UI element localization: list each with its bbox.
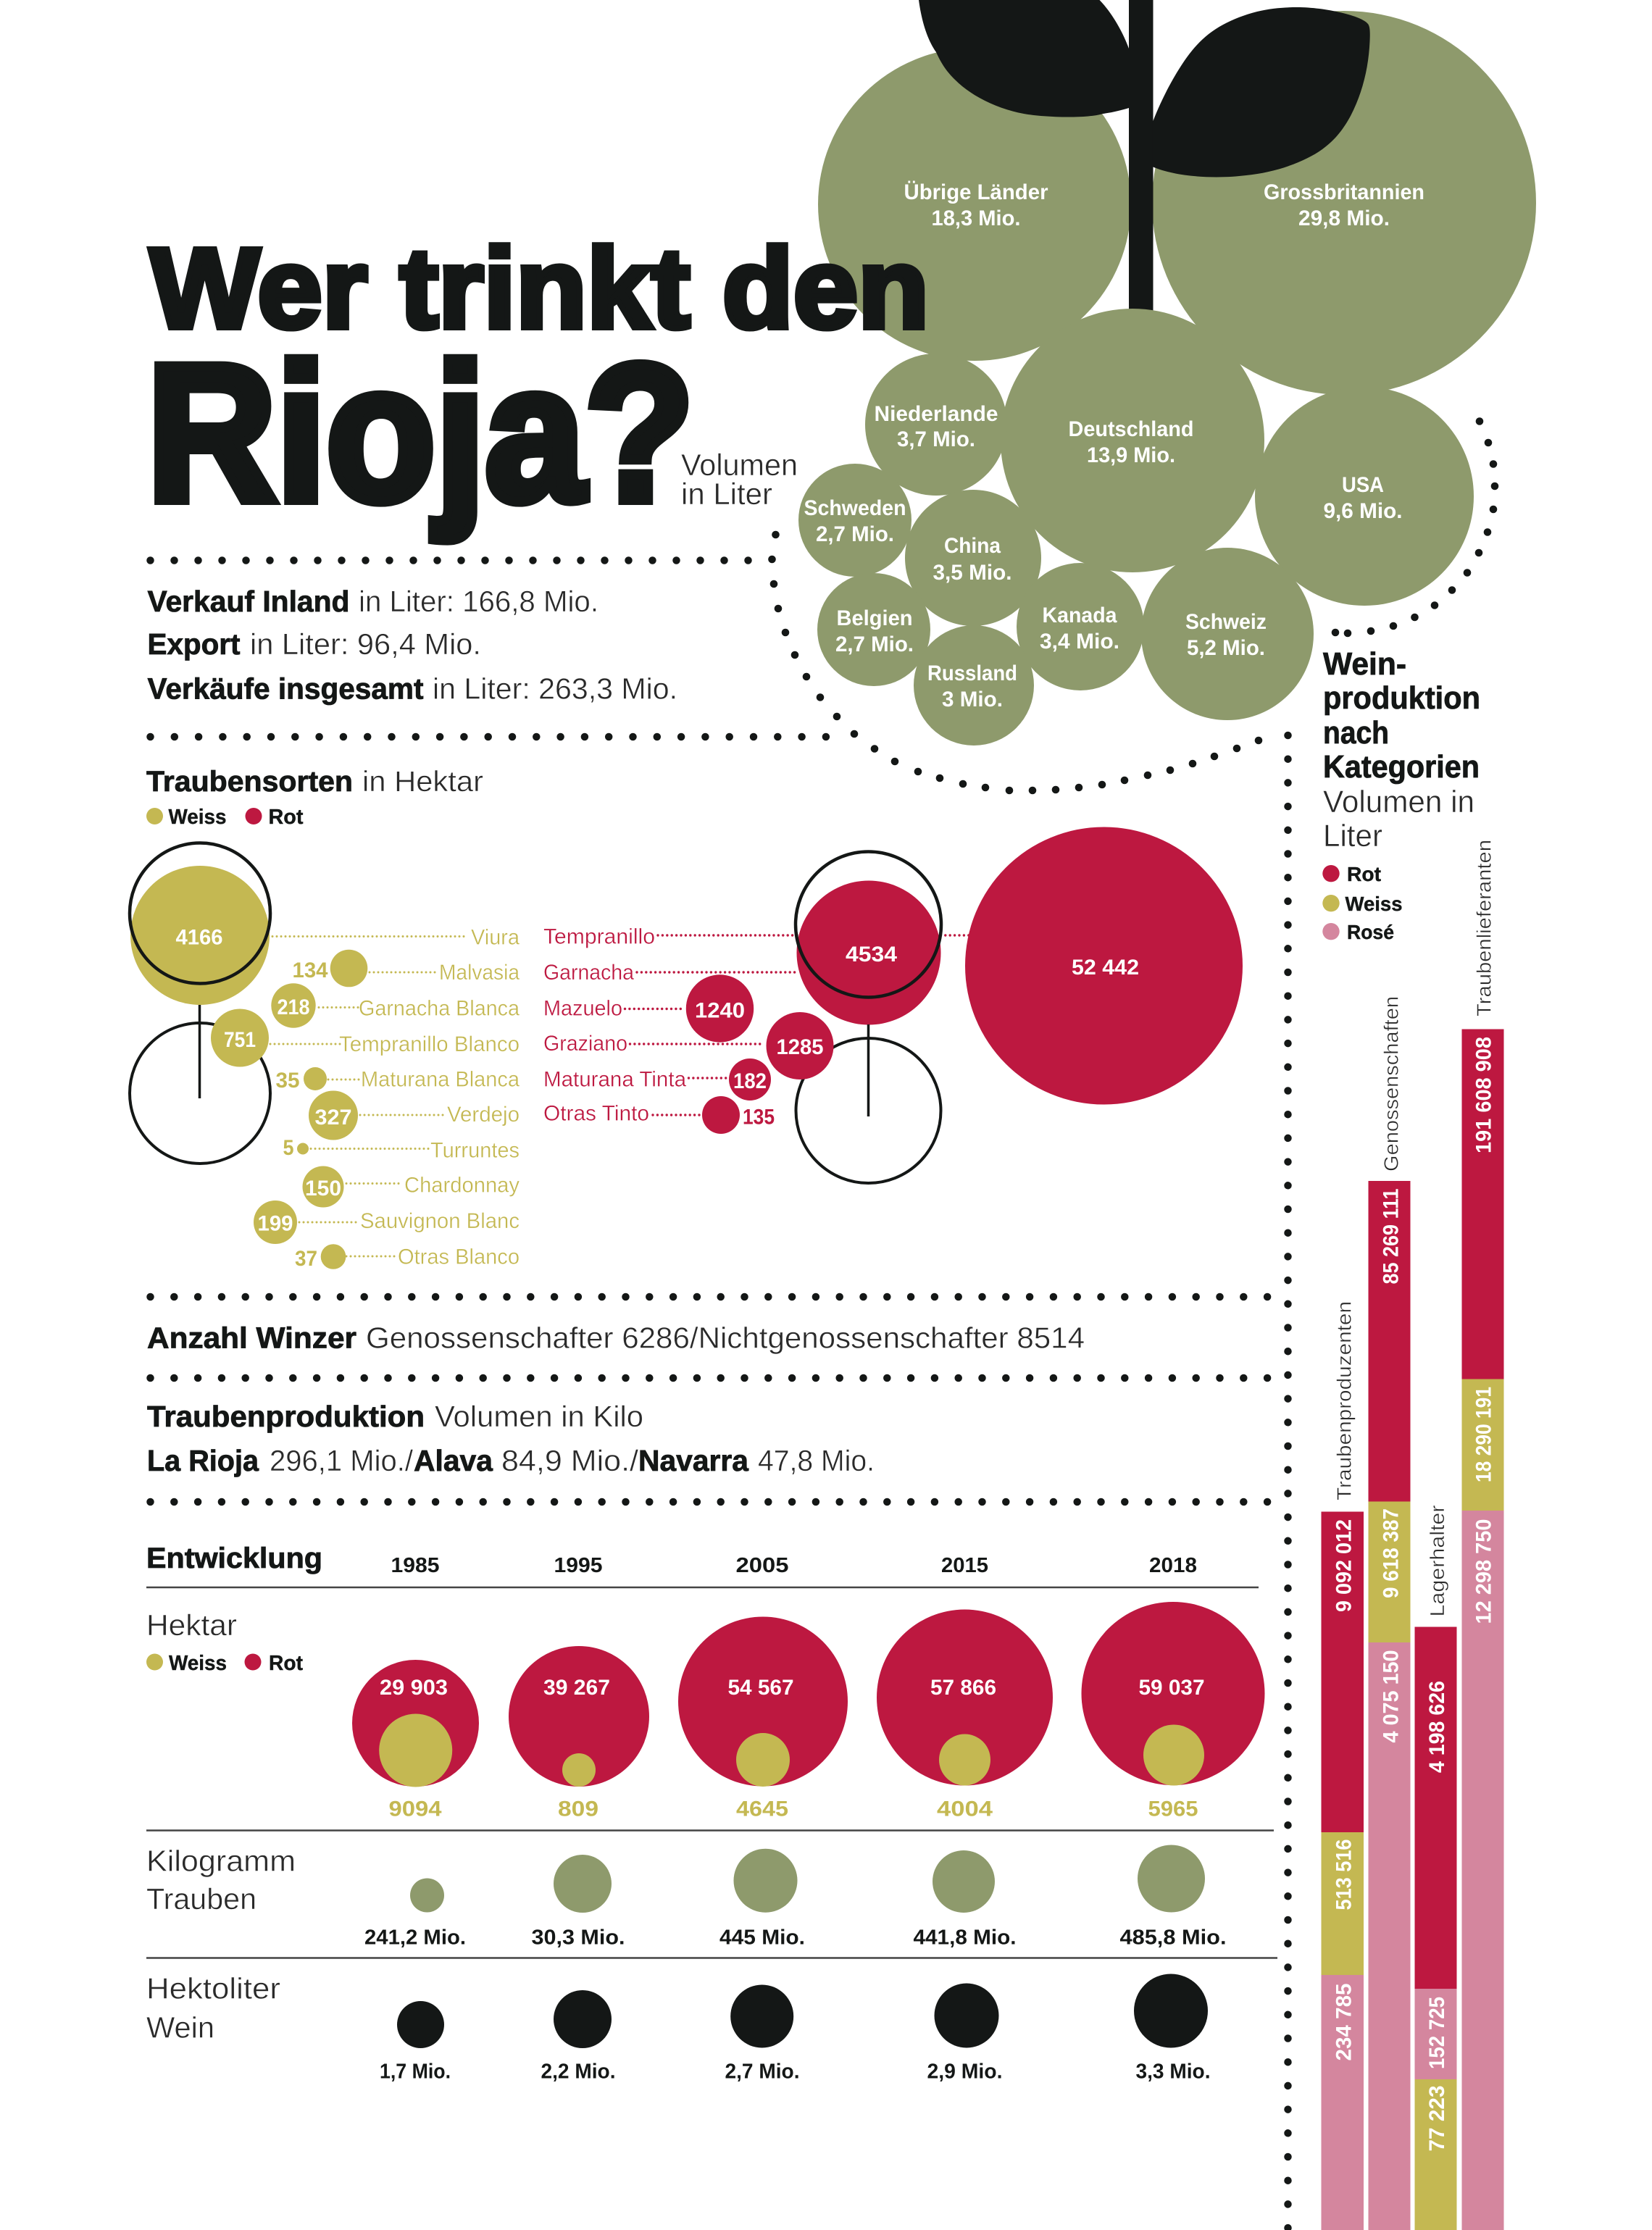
names white varieties: Turruntes (430, 1139, 520, 1162)
chart: white grape varieties (130, 843, 520, 1271)
label: Deutschland: Deutschland (1068, 417, 1194, 441)
values hectares white: 809 (558, 1797, 598, 1821)
label: Niederlande: 3,7 Mio. (897, 427, 975, 451)
row label: Kilogramm Trauben: Trauben (146, 1882, 256, 1916)
text block: sales volumes: in Liter: 263,3 Mio. (433, 672, 677, 706)
values white varieties: 327 (314, 1106, 352, 1129)
row label: Hektar: Hektar (146, 1608, 237, 1642)
label: Deutschland: 13,9 Mio. (1087, 443, 1175, 467)
values kilogram grapes: 445 Mio. (719, 1926, 805, 1949)
chart: stacked bar Genossenschaften: 85 269 111 (1380, 1188, 1403, 1284)
values white varieties: 134 (293, 959, 328, 982)
names white varieties: Verdejo (447, 1103, 520, 1127)
label: Grossbritannien: Grossbritannien (1264, 180, 1424, 204)
values white varieties: 199 (258, 1211, 293, 1236)
grape: Kanada (1017, 563, 1144, 690)
names white varieties: Malvasia (439, 961, 520, 985)
grape: Belgien (817, 573, 930, 686)
chart: stacked bar Traubenproduzenten: Traubenproduzenten (1333, 1301, 1355, 1500)
dotted dividers (151, 561, 1288, 2230)
names white varieties: Garnacha Blanca (359, 997, 520, 1020)
values white varieties: 4166 (175, 926, 223, 949)
grape: Schweden (798, 464, 911, 577)
names red varieties: Otras Tinto (543, 1101, 649, 1126)
label: Grossbritannien: 29,8 Mio. (1298, 206, 1390, 230)
chart: stacked bar Lagerhalter (1414, 1506, 1456, 2230)
chart: stacked bar Traubenlieferanten: 191 608 908 (1472, 1037, 1495, 1153)
icon: left leaf (919, 0, 1129, 117)
values white varieties: 751 (224, 1028, 256, 1052)
chart: stacked bar Genossenschaften (1368, 996, 1410, 2230)
values white varieties: 35 (275, 1069, 300, 1093)
bubbles hectares red (352, 1602, 1265, 1787)
label: Kanada: Kanada (1042, 604, 1117, 627)
grape: Niederlande (865, 354, 1007, 496)
legend: Weiss / Rot: Weiss (168, 806, 226, 829)
values red varieties: 135 (743, 1106, 775, 1129)
values hectolitres wine: 3,3 Mio. (1136, 2060, 1210, 2084)
row label: Hektoliter Wein (146, 1972, 280, 2045)
names red varieties (543, 924, 686, 1126)
legend: Weiss / Rot: Rot (269, 1652, 303, 1675)
text block: sales volumes: Verkäufe insgesamt (148, 672, 424, 706)
label: Schweden: Schweden (804, 496, 906, 520)
values hectolitres wine: 2,2 Mio. (541, 2060, 616, 2084)
values kilogram grapes: 485,8 Mio. (1120, 1926, 1226, 1949)
column years (391, 1554, 1197, 1577)
text block: Anzahl Winzer: Genossenschafter 6286/Nichtgenossenschafter 8514 (366, 1321, 1085, 1355)
label: Kanada: 3,4 Mio. (1040, 630, 1119, 653)
values red varieties: 182 (733, 1069, 767, 1093)
icon: grape stem (1129, 0, 1154, 326)
bubbles hectolitres wine (397, 1974, 1208, 2048)
grape: China (905, 490, 1041, 626)
bubbles kilogram grapes (410, 1845, 1205, 1913)
chart: stacked bar Lagerhalter: 77 223 (1425, 2085, 1449, 2152)
heading: Weinproduktion nach Kategorien: produktion (1323, 680, 1480, 716)
text block: Traubenproduktion: Alava (414, 1444, 493, 1477)
values white varieties: 150 (305, 1177, 341, 1200)
text block: sales volumes: Export (148, 627, 241, 661)
legend: Rot / Weiss / Rosé: Weiss (1345, 893, 1403, 915)
values hectares red: 29 903 (380, 1676, 448, 1700)
legend: Weiss / Rot: Weiss (169, 1652, 227, 1675)
names white varieties: Viura (471, 926, 520, 949)
values hectares white: 5965 (1148, 1797, 1198, 1821)
dotted path around the grape bunch (768, 417, 1498, 794)
text block: sales volumes: in Liter: 166,8 Mio. (359, 585, 598, 618)
chart: stacked bar Traubenlieferanten: 12 298 750 (1472, 1519, 1495, 1624)
column years: 2018 (1149, 1554, 1197, 1577)
values hectares white: 4004 (937, 1797, 993, 1821)
title: Rioja? (147, 324, 694, 543)
label: Schweiz: 5,2 Mio. (1187, 636, 1265, 660)
values hectares red: 57 866 (930, 1676, 996, 1700)
values kilogram grapes: 241,2 Mio. (364, 1926, 466, 1949)
bubbles hectares white (379, 1714, 1204, 1787)
label: Russland: 3 Mio. (942, 688, 1003, 711)
names white varieties (339, 926, 520, 1269)
grape: Grossbritannien (1152, 11, 1536, 395)
icon: white wine glass (130, 843, 270, 1164)
values hectares white (388, 1797, 1198, 1821)
chart: stacked bar Traubenproduzenten: 513 516 (1332, 1839, 1356, 1910)
label: Belgien: 2,7 Mio. (835, 632, 914, 656)
values hectolitres wine: 1,7 Mio. (380, 2060, 451, 2084)
table: Entwicklung (146, 1542, 1277, 2084)
label: Russland: Russland (927, 661, 1017, 685)
label: Schweiz: Schweiz (1185, 610, 1267, 634)
legend: Weiss / Rot: Rot (268, 806, 304, 829)
label: Schweden: 2,7 Mio. (816, 522, 894, 546)
heading: Weinproduktion nach Kategorien: Volumen in (1323, 785, 1474, 819)
values white varieties: 218 (277, 995, 310, 1019)
chart: stacked bar Traubenlieferanten: 18 290 191 (1472, 1387, 1495, 1482)
grape: Schweiz (1141, 548, 1314, 720)
values hectares red: 59 037 (1139, 1676, 1204, 1700)
names white varieties: Chardonnay (404, 1174, 520, 1197)
chart: stacked bar Lagerhalter: Lagerhalter (1426, 1506, 1448, 1617)
label: China: China (944, 534, 1001, 558)
label: China: 3,5 Mio. (933, 561, 1011, 585)
label: Belgien: Belgien (836, 606, 913, 630)
text block: sales volumes: in Liter: 96,4 Mio. (250, 627, 481, 661)
chart: stacked bar Traubenlieferanten: Traubenlieferanten (1472, 840, 1495, 1016)
values hectolitres wine: 2,9 Mio. (927, 2060, 1003, 2084)
column years: 2005 (736, 1554, 788, 1577)
chart: stacked bar Traubenproduzenten (1322, 1301, 1364, 2230)
icon: red wine glass (796, 852, 941, 1183)
row label: Hektoliter Wein: Wein (146, 2011, 214, 2045)
values hectolitres wine (380, 2060, 1210, 2084)
text block: Traubenproduktion: 47,8 Mio. (758, 1444, 875, 1477)
text block: Traubenproduktion (147, 1400, 875, 1477)
values hectares white: 4645 (736, 1797, 788, 1821)
chart: stacked bar Traubenproduzenten: 234 785 (1332, 1984, 1356, 2060)
heading: Traubensorten in Hektar (146, 766, 483, 798)
heading: Weinproduktion nach Kategorien: Liter (1323, 819, 1382, 853)
values red varieties: 4534 (846, 943, 897, 966)
values kilogram grapes (364, 1926, 1226, 1949)
grape: Russland (914, 625, 1034, 746)
text block: Traubenproduktion: 296,1 Mio./ (270, 1444, 414, 1477)
legend: Weiss / Rot (146, 1652, 303, 1675)
names white varieties: Maturana Blanca (361, 1068, 520, 1091)
text block: Traubenproduktion: La Rioja (147, 1444, 259, 1477)
names red varieties: Maturana Tinta (543, 1068, 686, 1091)
chart: stacked bar Lagerhalter: 4 198 626 (1425, 1681, 1449, 1773)
bubbles white varieties (211, 950, 367, 1269)
label: USA: 9,6 Mio. (1323, 499, 1403, 523)
row label: Kilogramm Trauben: Kilogramm (146, 1845, 296, 1878)
bubbles red varieties (686, 827, 1243, 1134)
legend: Rot / Weiss / Rosé: Rot (1347, 863, 1381, 885)
values hectares red (380, 1676, 1204, 1700)
values red varieties: 1285 (777, 1035, 823, 1059)
label: Übrige Länder: Übrige Länder (904, 180, 1048, 204)
legend: Rot / Weiss / Rosé (1322, 863, 1403, 943)
text block: Traubenproduktion: Traubenproduktion (147, 1400, 425, 1433)
heading: Weinproduktion nach Kategorien: Wein- (1323, 646, 1406, 682)
column years: 1985 (391, 1554, 439, 1577)
legend: Weiss / Rot (146, 806, 304, 829)
heading: Weinproduktion nach Kategorien: Kategorien (1323, 749, 1480, 785)
icon: right leaf (1152, 7, 1370, 177)
legend: Rot / Weiss / Rosé: Rosé (1347, 921, 1394, 943)
values red varieties: 1240 (695, 998, 745, 1023)
text block: sales volumes (148, 585, 677, 706)
values red varieties (695, 943, 1139, 1129)
heading: Entwicklung: Entwicklung (146, 1542, 322, 1574)
values kilogram grapes: 441,8 Mio. (913, 1926, 1016, 1949)
label: Übrige Länder: 18,3 Mio. (932, 206, 1020, 230)
values hectolitres wine: 2,7 Mio. (725, 2060, 800, 2084)
subtitle: Volumen in Liter: Volumen (681, 448, 798, 482)
grape: Übrige Länder (818, 48, 1131, 361)
names white varieties: Sauvignon Blanc (360, 1209, 520, 1233)
values kilogram grapes: 30,3 Mio. (532, 1926, 625, 1949)
heading: Traubensorten in Hektar: Traubensorten (146, 766, 353, 798)
subtitle: Volumen in Liter (681, 448, 798, 511)
row label: Hektoliter Wein: Hektoliter (146, 1972, 280, 2005)
names red varieties: Tempranillo (543, 924, 655, 949)
chart: stacked bar Genossenschaften: Genossenschaften (1380, 996, 1403, 1172)
grape: Deutschland (1001, 309, 1264, 572)
values red varieties: 52 442 (1072, 956, 1139, 980)
chart: stacked bar Genossenschaften: 4 075 150 (1380, 1650, 1403, 1743)
text block: Traubenproduktion: Navarra (638, 1444, 749, 1477)
text block: Traubenproduktion: 84,9 Mio./ (501, 1444, 639, 1477)
heading: Weinproduktion nach Kategorien: nach (1323, 715, 1389, 751)
chart: stacked bar Traubenproduzenten: 9 092 012 (1332, 1519, 1356, 1612)
names white varieties: Otras Blanco (398, 1245, 520, 1269)
leaders white varieties (270, 936, 468, 1256)
names red varieties: Graziano (543, 1032, 627, 1056)
text block: Anzahl Winzer: Anzahl Winzer (147, 1321, 356, 1355)
title: Wer trinkt den (150, 225, 929, 352)
values hectares red: 39 267 (543, 1676, 610, 1700)
chart: stacked bar Genossenschaften: 9 618 387 (1380, 1508, 1403, 1598)
panel: grape bunch export volumes (798, 0, 1536, 746)
chart: stacked bar Traubenlieferanten (1462, 840, 1504, 2230)
column years: 2015 (941, 1554, 988, 1577)
names white varieties: Tempranillo Blanco (339, 1032, 520, 1056)
names red varieties: Garnacha (543, 961, 634, 985)
heading: Traubensorten in Hektar: in Hektar (362, 766, 483, 798)
text block: sales volumes: Verkauf Inland (148, 585, 349, 618)
grape: USA (1255, 387, 1474, 606)
label: USA: USA (1342, 473, 1384, 497)
values hectares red: 54 567 (727, 1676, 794, 1700)
heading: Weinproduktion nach Kategorien (1323, 646, 1480, 853)
names red varieties: Mazuelo (543, 997, 622, 1020)
title (147, 225, 929, 543)
subtitle: Volumen in Liter: in Liter (681, 477, 772, 511)
text block: Traubenproduktion: Volumen in Kilo (435, 1400, 643, 1433)
column years: 1995 (554, 1554, 603, 1577)
values white varieties: 5 (283, 1136, 294, 1160)
values hectares white: 9094 (388, 1797, 442, 1821)
values white varieties: 37 (295, 1247, 317, 1271)
chart: red grape varieties (543, 827, 1243, 1183)
chart: stacked bar Lagerhalter: 152 725 (1425, 1997, 1449, 2069)
row label: Kilogramm Trauben (146, 1845, 296, 1916)
label: Niederlande: Niederlande (874, 402, 998, 426)
leaders red varieties (625, 935, 969, 1115)
values white varieties (175, 926, 352, 1271)
